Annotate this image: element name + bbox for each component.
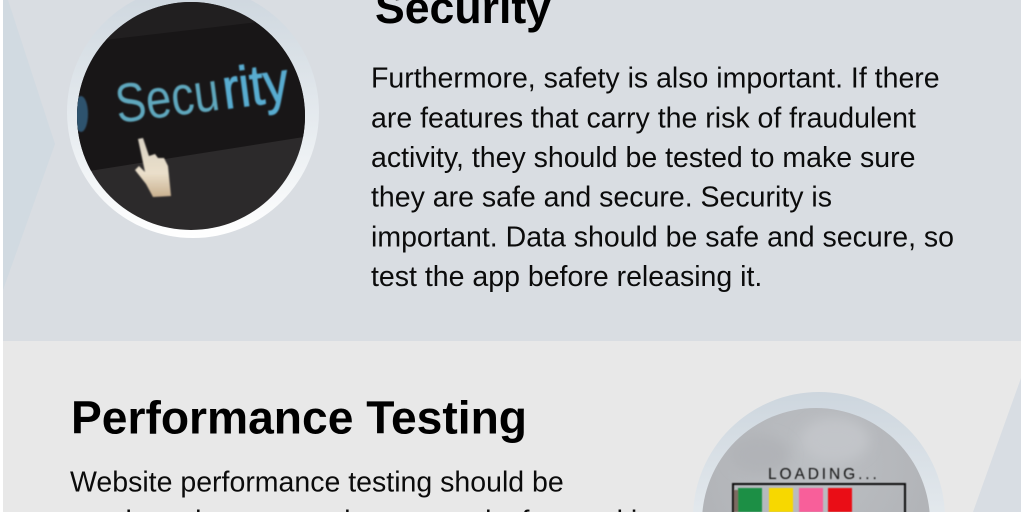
text block: security description: test the app before releasing it. bbox=[371, 261, 762, 293]
image: security screen photo bbox=[67, 0, 319, 238]
panel: performance testing bbox=[3, 341, 1021, 512]
panel: security bbox=[3, 0, 1021, 341]
text block: security description: they are safe and secure. Security is bbox=[371, 182, 832, 214]
text block: performance description: Website performance testing should be bbox=[70, 466, 564, 498]
image: security screen photo: rity bbox=[218, 50, 293, 122]
text block: security description: activity, they should be tested to make sure bbox=[371, 142, 915, 174]
chevron: performance panel bbox=[973, 378, 1021, 512]
text block: security description: important. Data should be safe and secure, so bbox=[371, 221, 954, 253]
heading: performance testing: Performance Testing bbox=[71, 392, 527, 444]
image: loading bar photo: LOADING... bbox=[768, 466, 880, 483]
image: loading bar photo bbox=[693, 392, 945, 512]
image: security screen photo: Secu bbox=[111, 60, 223, 135]
text block: security description: are features that carry the risk of fraudulent bbox=[371, 102, 916, 134]
chevron: security panel bbox=[3, 0, 55, 290]
text block: security description: Furthermore, safety is also important. If there bbox=[371, 62, 940, 94]
